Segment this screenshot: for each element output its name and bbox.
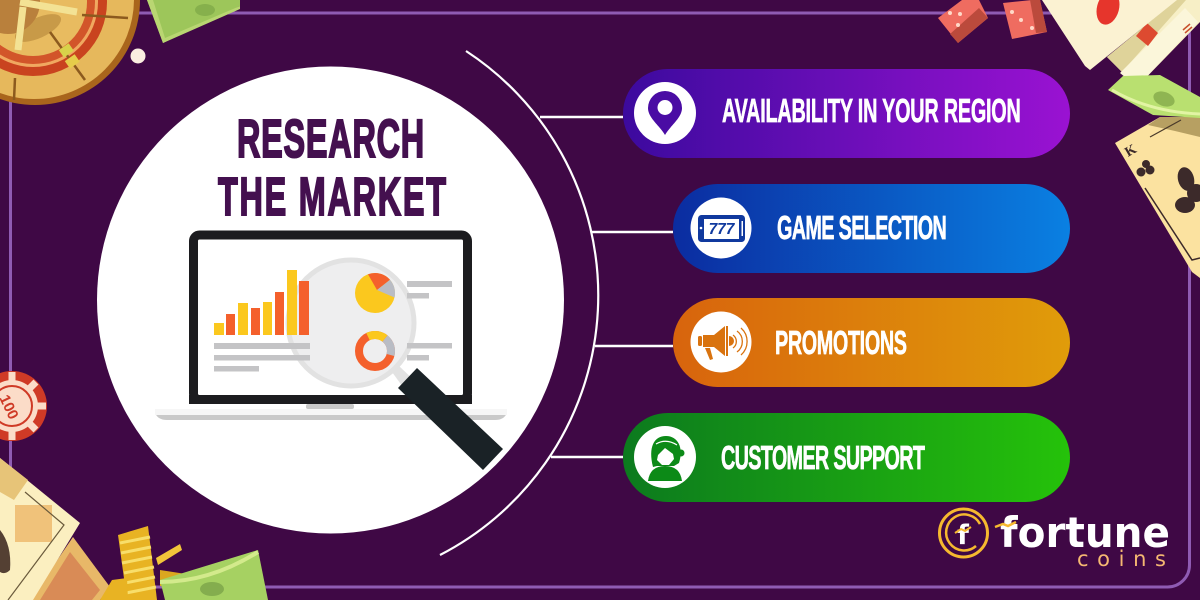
heading: research the market: THE MARKET xyxy=(218,168,446,227)
icon: laptop xyxy=(155,235,507,420)
connector lines xyxy=(540,117,673,457)
logo: fortune coins xyxy=(940,508,1170,571)
magnifier handle xyxy=(398,368,503,470)
donut chart xyxy=(359,335,391,367)
decoration: playing cards top right xyxy=(1042,0,1200,87)
decoration: roulette wheel xyxy=(0,0,140,105)
decoration: playing card king of clubs: K xyxy=(1122,142,1140,160)
decoration: banknote bottom xyxy=(160,550,268,600)
icon: slot machine phone: 777 xyxy=(709,221,736,238)
text lines left xyxy=(214,343,310,372)
magnifier lens xyxy=(288,260,418,394)
decoration: gold coins xyxy=(100,526,188,600)
icon: location pin xyxy=(634,82,696,144)
label: AVAILABILITY IN YOUR REGION xyxy=(722,92,1021,129)
decoration: banknote right xyxy=(1108,75,1200,118)
text lines right xyxy=(407,281,452,360)
icon: slot machine phone xyxy=(690,198,752,258)
panel: research the market circle xyxy=(97,66,564,534)
icon: coin xyxy=(940,509,988,557)
panel: promotions xyxy=(673,298,1070,387)
connector arc xyxy=(440,51,598,555)
pie chart xyxy=(355,273,395,313)
swoosh xyxy=(995,522,1016,527)
label: GAME SELECTION xyxy=(777,209,947,246)
tagline: coins xyxy=(1077,547,1166,571)
panel: game selection xyxy=(673,184,1070,273)
heading: research the market xyxy=(218,110,446,227)
decoration: white dot xyxy=(130,48,146,64)
panel: customer support xyxy=(623,413,1070,502)
heading: research the market: RESEARCH xyxy=(237,110,424,169)
bar chart xyxy=(214,270,309,335)
decoration: casino chip xyxy=(0,371,47,441)
icon: megaphone xyxy=(690,312,752,372)
label: PROMOTIONS xyxy=(775,324,907,361)
decoration: dice xyxy=(938,0,1047,43)
decoration: banknote top left xyxy=(147,0,240,43)
icon: coin: f xyxy=(957,520,969,551)
label: CUSTOMER SUPPORT xyxy=(721,439,925,476)
decoration: playing cards bottom left xyxy=(0,458,110,600)
panel: availability in your region xyxy=(623,69,1070,158)
wordmark: fortune xyxy=(1000,508,1170,557)
icon: support agent xyxy=(634,426,696,488)
decoration: playing card king of clubs xyxy=(1115,117,1200,278)
